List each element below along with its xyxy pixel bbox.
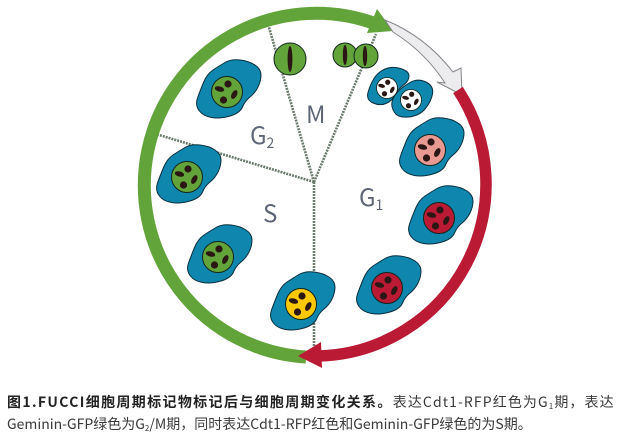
G1 cell, pink nucleus <box>400 118 464 176</box>
phase label: G2: 2 <box>267 133 275 153</box>
caption line 2: Geminin-GFP绿色为G2/M期，同时表达Cdt1-RFP红色和Geminin-GFP绿色的为S期。 <box>7 414 532 434</box>
dividing cell <box>333 43 378 68</box>
phase label: S: S <box>263 194 277 229</box>
grey arrow <box>385 20 462 95</box>
phase label: G1: 1 <box>376 195 383 215</box>
G1 cell, red nucleus <box>357 256 421 314</box>
S cell, green nucleus <box>188 225 252 283</box>
phase divider lines <box>156 24 376 350</box>
phase label: G2: G <box>250 116 267 151</box>
green arc arrow <box>144 9 393 357</box>
G2 cell, green nucleus <box>197 60 261 118</box>
red arc arrow <box>298 90 486 368</box>
mitotic cell <box>274 43 306 75</box>
daughter cells, white nuclei <box>368 67 433 117</box>
phase label: M: M <box>306 95 326 130</box>
G1 cell, red nucleus <box>409 186 473 244</box>
S cell, yellow nucleus <box>271 272 335 330</box>
caption line 1: 图1.FUCCI细胞周期标记物标记后与细胞周期变化关系。表达Cdt1-RFP红色为G1期，表达 <box>7 392 615 412</box>
caption <box>7 392 615 434</box>
G2/S cell, green nucleus <box>157 145 221 203</box>
phase label: G1: G <box>359 178 376 213</box>
